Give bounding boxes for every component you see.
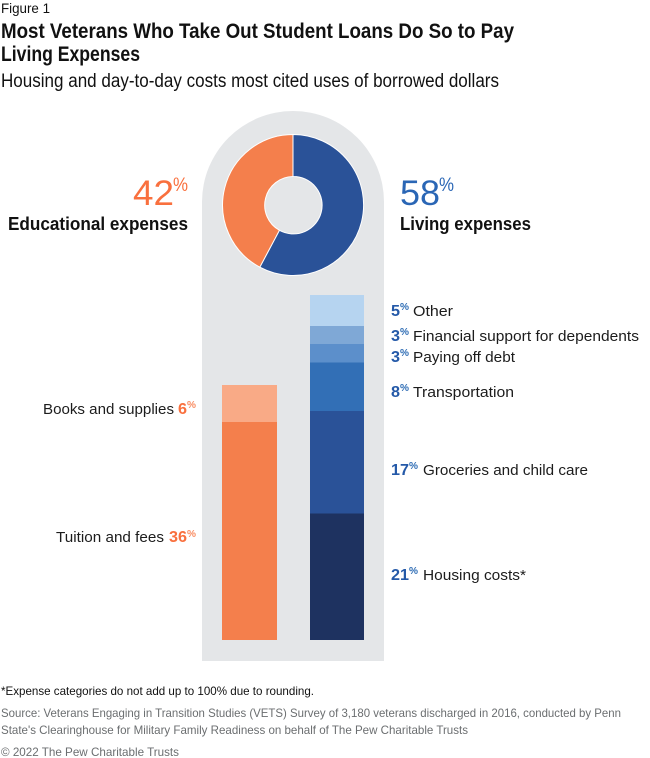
label: other: Other — [413, 303, 453, 320]
donut chart — [223, 134, 364, 275]
label: groceries: % — [409, 461, 418, 472]
label: groceries: 17 — [391, 462, 409, 479]
label: paying off debt: Paying off debt — [413, 349, 516, 366]
label: tuition and fees: % — [187, 529, 196, 540]
title: Most Veterans Who Take Out Student Loans Do So to Pay — [1, 20, 514, 43]
label: tuition and fees: 36 — [169, 529, 187, 546]
stacked bar: educational — [222, 385, 277, 640]
label: other — [391, 302, 453, 320]
label: housing: Housing costs* — [423, 567, 526, 584]
segment: housing — [310, 514, 364, 640]
segment: paying off debt — [310, 344, 364, 362]
donut segment: educational 42% — [223, 134, 293, 267]
label: tuition and fees: Tuition and fees — [56, 529, 164, 546]
segment: financial support — [310, 326, 364, 344]
label: financial support: % — [400, 327, 409, 338]
grey arch panel — [202, 111, 384, 661]
callout: 42% educational: Educational expenses — [8, 213, 188, 234]
callout: 42% educational: % — [173, 175, 188, 196]
callout: 58% living — [400, 174, 531, 234]
label: other: % — [400, 302, 409, 313]
label: paying off debt: 3 — [391, 349, 400, 366]
callout: 42% educational: 42 — [133, 174, 174, 213]
figure label: Figure 1 — [1, 0, 50, 16]
label: transportation: Transportation — [413, 384, 514, 401]
label: books and supplies: 6 — [178, 401, 187, 418]
label: transportation: % — [400, 383, 409, 394]
callout: 42% educational — [8, 174, 188, 234]
label: financial support: 3 — [391, 328, 400, 345]
label: financial support: Financial support for dependents — [413, 328, 639, 345]
label: books and supplies: % — [187, 400, 196, 411]
footnote: *Expense categories do not add up to 100% due to rounding. — [1, 684, 314, 698]
segment: transportation — [310, 362, 364, 411]
segment: tuition and fees — [222, 422, 277, 640]
title — [1, 20, 514, 66]
subtitle: Housing and day-to-day costs most cited uses of borrowed dollars — [1, 71, 499, 92]
stacked bar: living — [310, 295, 364, 640]
segment: other — [310, 295, 364, 326]
label: other: 5 — [391, 303, 400, 320]
title: Living Expenses — [1, 43, 140, 66]
label: paying off debt: % — [400, 348, 409, 359]
label: housing: % — [409, 566, 418, 577]
callout: 58% living: Living expenses — [400, 213, 531, 234]
segment: groceries — [310, 411, 364, 514]
label: books and supplies: Books and supplies — [43, 401, 174, 418]
source note: State's Clearinghouse for Military Family Readiness on behalf of The Pew Charitable Trusts — [1, 723, 468, 737]
label: transportation: 8 — [391, 384, 400, 401]
callout: 58% living: % — [439, 175, 454, 196]
label: housing: 21 — [391, 567, 409, 584]
segment: books and supplies — [222, 385, 277, 422]
donut segment: living 58% — [260, 134, 364, 275]
callout: 58% living: 58 — [400, 174, 440, 213]
source note: Source: Veterans Engaging in Transition Studies (VETS) Survey of 3,180 veterans discharged in 2016, conducted by Penn — [1, 706, 621, 720]
label: housing — [391, 566, 526, 584]
label: groceries: Groceries and child care — [423, 462, 588, 479]
source note — [1, 706, 621, 737]
